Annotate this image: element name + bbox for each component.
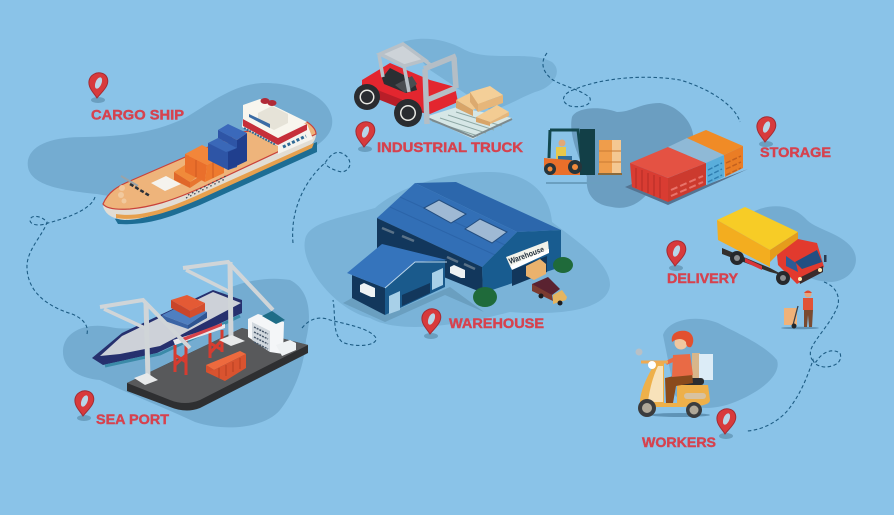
main front roof xyxy=(377,183,517,267)
ship deck xyxy=(103,122,316,209)
illustration: small forklift xyxy=(544,129,622,184)
hull stripe xyxy=(116,143,314,219)
dock door xyxy=(512,256,547,286)
cab xyxy=(777,239,824,284)
main back roof xyxy=(415,182,561,232)
box stack xyxy=(599,140,612,173)
driver xyxy=(556,147,566,159)
wheels xyxy=(354,84,380,110)
blob: cargo ship backdrop xyxy=(28,83,332,197)
blob: sea port backdrop xyxy=(63,279,309,427)
illustration: delivery truck xyxy=(717,207,826,285)
front shield xyxy=(640,363,678,407)
blue container xyxy=(668,138,724,163)
deck hatch xyxy=(151,176,181,191)
crane two xyxy=(183,262,273,346)
label: industrial truck: INDUSTRIAL TRUCK xyxy=(377,140,523,155)
handlebar, headlight, mirror xyxy=(641,360,668,364)
wing front wall xyxy=(352,275,385,315)
AC units xyxy=(360,283,375,297)
small truck xyxy=(532,277,567,306)
pin: warehouse xyxy=(422,309,441,339)
container stack: blue xyxy=(208,124,247,170)
port ship hull xyxy=(92,290,242,365)
label: sea port: SEA PORT xyxy=(96,412,170,427)
illustration: industrial truck xyxy=(354,44,512,139)
pin: sea port xyxy=(75,391,94,421)
bushes xyxy=(473,287,497,307)
portholes xyxy=(186,176,226,198)
wing side wall xyxy=(385,260,445,315)
skylights xyxy=(424,200,466,223)
wheels xyxy=(544,163,556,175)
canopy frame xyxy=(379,44,432,92)
illustration: warehouse xyxy=(343,182,573,322)
label: storage: STORAGE xyxy=(760,145,831,160)
base xyxy=(625,169,748,205)
label: workers: WORKERS xyxy=(642,435,716,450)
pin: cargo ship xyxy=(89,73,108,103)
wall windows xyxy=(382,228,475,269)
orange container xyxy=(687,130,743,155)
ship shadow xyxy=(115,142,317,224)
warehouse sign: Warehouse xyxy=(508,245,546,266)
label: cargo ship: CARGO SHIP xyxy=(91,108,184,122)
pin: workers xyxy=(717,409,736,439)
blob: truck backdrop xyxy=(403,39,557,110)
gantry xyxy=(175,330,222,375)
cage xyxy=(549,130,582,165)
wheels xyxy=(638,399,656,417)
pin: delivery xyxy=(667,241,686,271)
pin: industrial truck xyxy=(356,122,375,152)
seat xyxy=(677,378,704,385)
boxes xyxy=(526,259,546,280)
label: delivery: DELIVERY xyxy=(667,271,738,286)
blob: storage backdrop xyxy=(571,103,693,208)
gable wall xyxy=(482,230,561,293)
ground shadow xyxy=(343,287,484,322)
ship hull xyxy=(103,130,316,220)
rider torso xyxy=(672,354,693,377)
mast xyxy=(424,56,456,124)
label: warehouse: WAREHOUSE xyxy=(449,316,544,331)
ground shadow xyxy=(546,182,602,184)
red container xyxy=(630,147,706,178)
front wall xyxy=(377,218,483,293)
port containers xyxy=(206,351,246,381)
platform xyxy=(127,328,308,411)
head and helmet xyxy=(674,336,688,350)
truck body xyxy=(362,63,458,114)
pin: storage xyxy=(757,117,776,147)
illustration: scooter rider xyxy=(636,331,713,418)
rider legs xyxy=(665,372,693,403)
wheels xyxy=(730,251,744,265)
blob: delivery backdrop xyxy=(753,206,856,282)
illustration: sea port xyxy=(92,262,308,411)
chassis xyxy=(722,248,785,276)
blob: warehouse backdrop xyxy=(305,172,610,327)
mast xyxy=(580,129,595,175)
cargo box xyxy=(717,207,798,250)
delivery box xyxy=(692,353,700,380)
seat xyxy=(382,68,417,93)
route: dashed paths xyxy=(27,53,841,431)
blob: workers backdrop xyxy=(663,319,778,408)
body xyxy=(544,158,584,175)
gantry deck xyxy=(173,324,225,345)
crane and cargo xyxy=(118,176,150,204)
illustration: porter with hand cart xyxy=(781,290,819,329)
illustration: cargo ship xyxy=(103,98,317,224)
crane one xyxy=(100,300,190,385)
boxes xyxy=(456,86,509,126)
superstructure xyxy=(242,98,313,154)
wing roof xyxy=(347,244,447,288)
container stack: orange xyxy=(174,145,224,188)
ship containers xyxy=(162,295,207,329)
rear body xyxy=(677,385,710,407)
port building xyxy=(248,311,296,356)
pallet forks xyxy=(425,107,512,139)
doors xyxy=(389,291,400,314)
illustration: containers xyxy=(625,130,748,205)
